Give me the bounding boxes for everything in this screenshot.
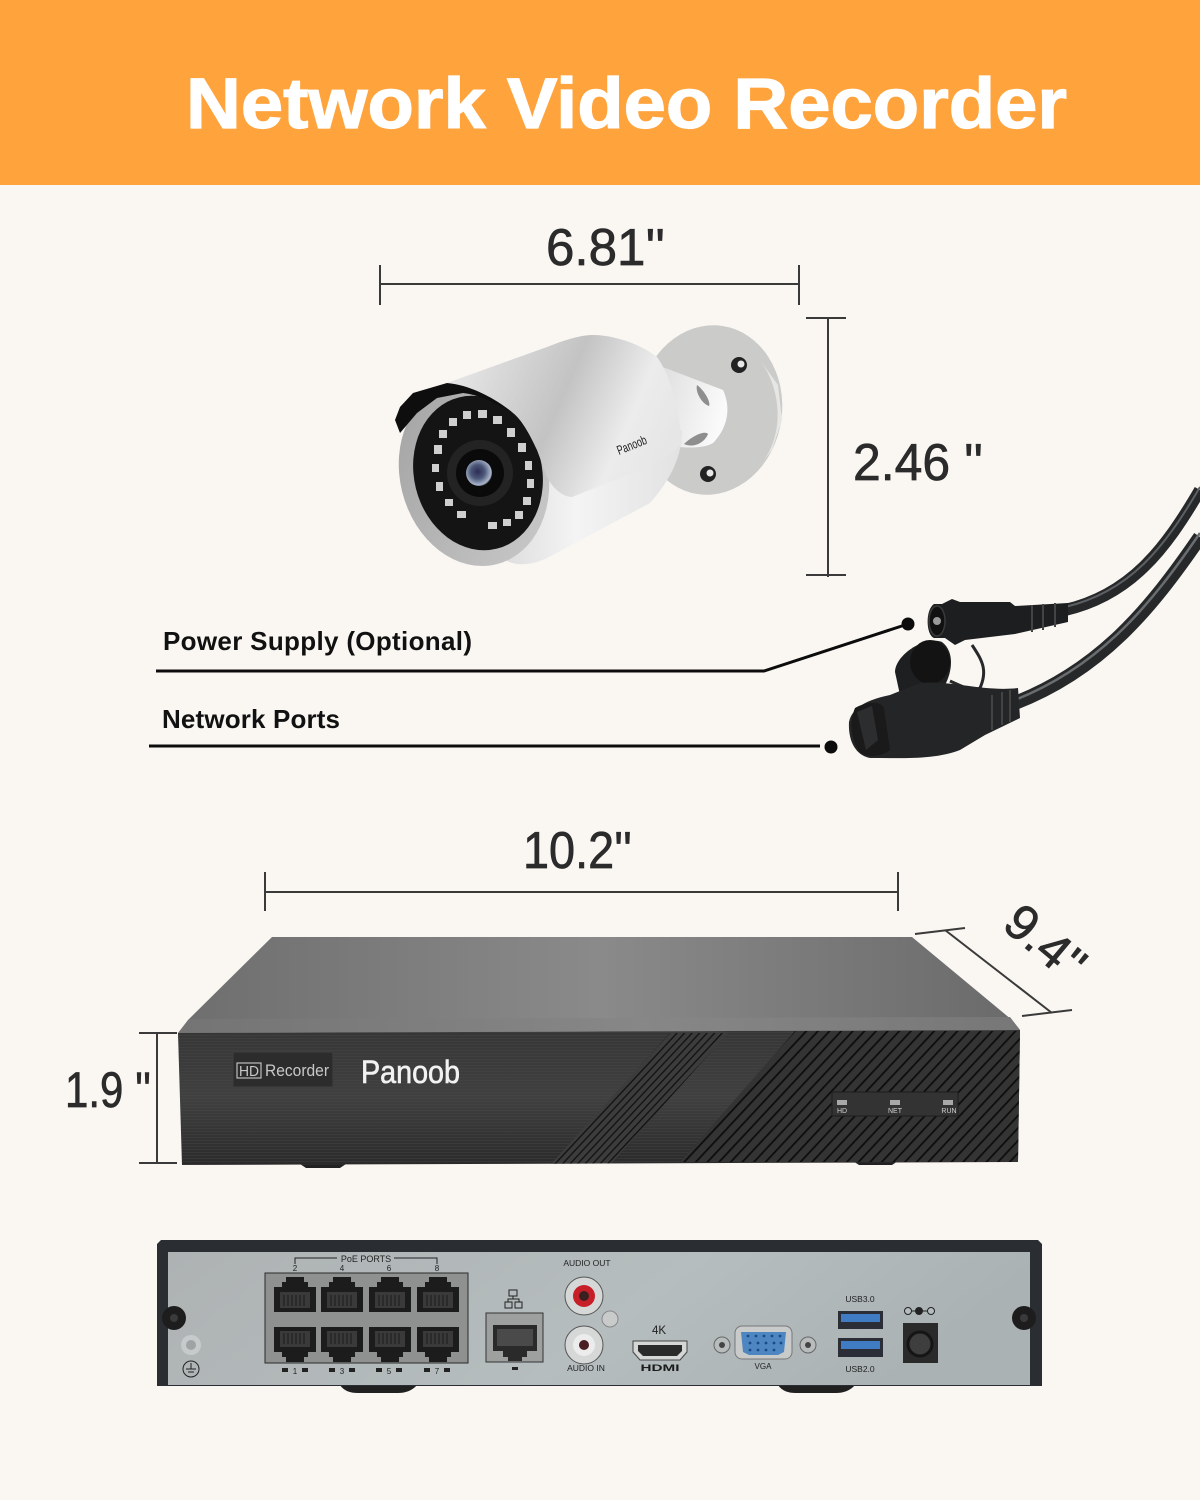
LED panel bbox=[832, 1092, 958, 1116]
audio in: AUDIO IN bbox=[567, 1363, 605, 1373]
audio out bbox=[563, 1258, 611, 1315]
PoE port numbers bottom: 7 bbox=[435, 1367, 440, 1376]
HD Recorder badge: Recorder bbox=[265, 1061, 329, 1080]
PoE port labels: 4 bbox=[340, 1264, 345, 1273]
PoE port labels: PoE PORTS bbox=[341, 1254, 391, 1264]
camera logo: Panoob bbox=[615, 432, 649, 458]
LED panel: NET bbox=[888, 1108, 903, 1115]
NVR rear view bbox=[157, 1240, 1042, 1393]
rear feet bbox=[340, 1385, 855, 1393]
dimension: NVR width 10.2: 10.2'' bbox=[523, 822, 632, 880]
audio in bbox=[565, 1326, 605, 1373]
VGA port: VGA bbox=[755, 1362, 772, 1371]
diagonal grooves left bbox=[550, 1033, 728, 1165]
PoE port labels: 6 bbox=[387, 1264, 392, 1273]
NVR front face bbox=[178, 1030, 1020, 1165]
HD Recorder badge bbox=[233, 1052, 333, 1087]
IR LEDs bbox=[432, 410, 534, 529]
title banner: Network Video Recorder bbox=[186, 65, 1067, 144]
NVR feet bbox=[300, 1161, 898, 1168]
dimension: NVR height 1.9: 1.9 '' bbox=[65, 1062, 151, 1118]
dimension: camera length 6.81: 6.81'' bbox=[546, 219, 665, 277]
NVR top face bbox=[178, 937, 1020, 1033]
mount arm bbox=[660, 366, 727, 448]
visor bbox=[395, 383, 513, 433]
power connector bbox=[928, 599, 1068, 690]
dimension: camera height 2.46: 2.46 '' bbox=[853, 434, 983, 492]
audio out: AUDIO OUT bbox=[563, 1258, 611, 1268]
PoE port labels: 2 bbox=[293, 1264, 298, 1273]
Panoob logo: Panoob bbox=[361, 1054, 460, 1090]
dimension: camera height 2.46 bbox=[806, 318, 983, 577]
upper cable bbox=[1065, 487, 1200, 610]
eight PoE RJ45 ports bbox=[265, 1273, 468, 1363]
USB ports: USB2.0 bbox=[845, 1364, 875, 1374]
dimension: NVR depth 9.4: 9.4'' bbox=[993, 893, 1097, 993]
HDMI port: HDMI bbox=[640, 1363, 680, 1374]
DC power input bbox=[903, 1308, 938, 1363]
network symbol bbox=[505, 1290, 522, 1308]
cables with connectors bbox=[849, 487, 1200, 758]
lens bbox=[447, 440, 513, 506]
dimension: NVR height 1.9 bbox=[65, 1033, 177, 1163]
rear metal panel bbox=[168, 1252, 1030, 1385]
lower cable bbox=[1015, 533, 1200, 703]
PoE port labels: 8 bbox=[435, 1264, 440, 1273]
HD Recorder badge: HD bbox=[239, 1063, 259, 1080]
case screws bbox=[162, 1306, 1036, 1330]
ground symbol and screw bbox=[181, 1335, 201, 1377]
dimension: NVR depth 9.4 bbox=[915, 893, 1097, 1016]
bullet camera photo bbox=[380, 316, 793, 582]
HDMI port bbox=[633, 1325, 687, 1374]
LED panel: HD bbox=[837, 1108, 847, 1115]
callout: power supply bbox=[156, 618, 914, 671]
camera shroud and upper body bbox=[447, 335, 682, 497]
wall mount plate bbox=[627, 316, 793, 504]
title banner bbox=[0, 0, 1200, 185]
PoE port numbers bottom: 3 bbox=[340, 1367, 345, 1376]
PoE port numbers bottom bbox=[282, 1367, 450, 1376]
PoE port labels bbox=[293, 1254, 440, 1273]
small screw bbox=[602, 1311, 618, 1327]
dimension: NVR width 10.2 bbox=[265, 822, 898, 911]
HDMI port: 4K bbox=[652, 1325, 666, 1337]
PoE port numbers bottom: 5 bbox=[387, 1367, 392, 1376]
VGA port bbox=[714, 1326, 816, 1371]
callout: network ports: Network Ports bbox=[162, 704, 340, 734]
dimension: camera length 6.81 bbox=[380, 219, 799, 305]
camera lower body bbox=[505, 430, 682, 564]
USB ports: USB3.0 bbox=[845, 1294, 875, 1304]
callout: network ports bbox=[149, 704, 838, 754]
USB ports bbox=[838, 1294, 883, 1374]
network connector bbox=[849, 640, 1020, 758]
NVR bevel bbox=[178, 1017, 1020, 1033]
PoE port numbers bottom: 1 bbox=[293, 1367, 298, 1376]
uplink LAN port bbox=[486, 1313, 543, 1370]
front ring bbox=[380, 366, 568, 582]
callout: power supply: Power Supply (Optional) bbox=[163, 626, 472, 656]
black face bbox=[397, 382, 559, 564]
diagonal grooves right bbox=[680, 1031, 1020, 1162]
LED panel: RUN bbox=[941, 1108, 957, 1115]
NVR front view bbox=[178, 937, 1020, 1168]
rear chassis bbox=[157, 1240, 1042, 1386]
